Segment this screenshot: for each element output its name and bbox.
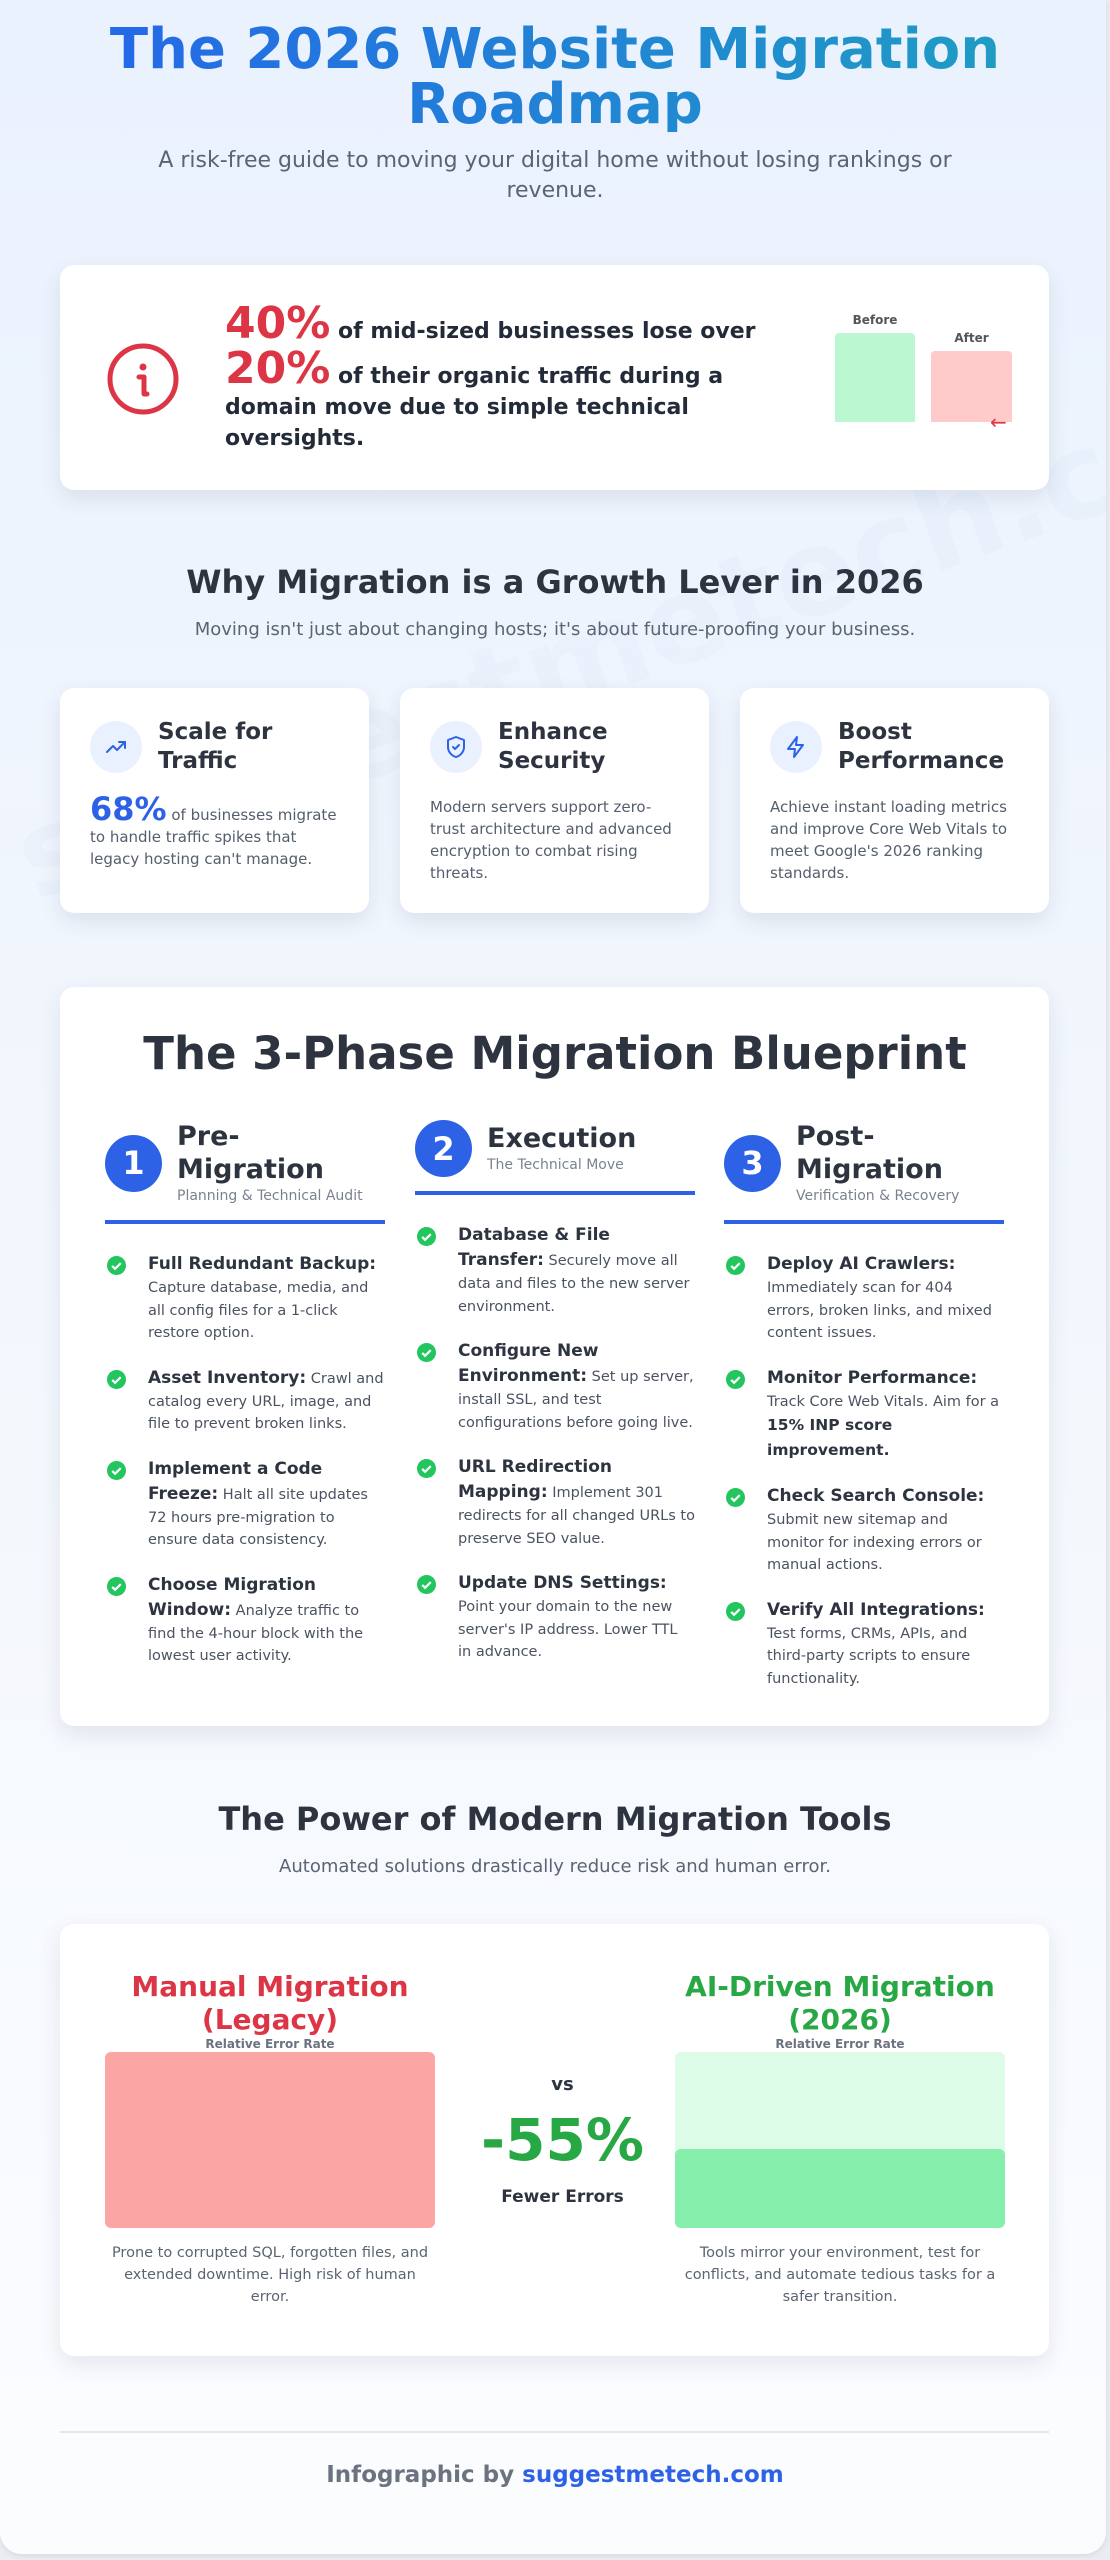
footer: Infographic by suggestmetech.com bbox=[326, 2462, 784, 2488]
column: post-migration: 3 bbox=[741, 1144, 764, 1182]
column: post-migration: Check Search Console: Submit new sitemap and monitor for indexing errors or manual actions. bbox=[767, 1486, 984, 1573]
panel: boost performance: Achieve instant loading metrics and improve Core Web Vitals to meet Google's 2026 ranking standards. bbox=[770, 798, 1007, 882]
manual migration: (Legacy) bbox=[202, 2003, 338, 2036]
title: Roadmap bbox=[407, 72, 703, 137]
chart: before/after: Before bbox=[853, 313, 897, 327]
subheading: tools: Automated solutions drastically reduce risk and human error. bbox=[279, 1856, 831, 1877]
title bbox=[0, 22, 1110, 132]
column: pre-migration: Pre- bbox=[177, 1121, 240, 1152]
ai migration: Relative Error Rate bbox=[775, 2037, 905, 2051]
column: post-migration bbox=[724, 1121, 1004, 1686]
panel: enhance security bbox=[400, 688, 709, 913]
ai migration: AI-Driven Migration bbox=[685, 1970, 995, 2003]
bar: manual bbox=[105, 2052, 435, 2228]
panel: alert stat bbox=[60, 265, 1049, 490]
chart: before/after: After bbox=[954, 331, 989, 345]
subtitle: A risk-free guide to moving your digital home without losing rankings or revenue. bbox=[158, 148, 952, 203]
panel: scale for traffic bbox=[60, 688, 369, 913]
panel: enhance security: Modern servers support zero-trust architecture and advanced encryption to combat rising threats. bbox=[430, 798, 672, 882]
column: execution bbox=[415, 1120, 695, 1660]
panel: scale for traffic: 68% of businesses migrate to handle traffic spikes that legacy hosting can't manage. bbox=[90, 790, 337, 868]
stat text: 40% of mid-sized businesses lose over 20% of their organic traffic during a domain move due to simple technical oversights. bbox=[225, 298, 756, 451]
arrow: ← bbox=[990, 410, 1007, 434]
vs center: vs bbox=[551, 2074, 574, 2095]
column: post-migration: Monitor Performance: Track Core Web Vitals. Aim for a 15% INP score improvement. bbox=[767, 1368, 999, 1459]
column: pre-migration: 1 bbox=[122, 1144, 145, 1182]
heading: tools: The Power of Modern Migration Tools bbox=[218, 1800, 892, 1838]
column: execution: 2 bbox=[432, 1130, 455, 1168]
manual migration: Manual Migration bbox=[131, 1970, 409, 2003]
column: execution: Execution bbox=[487, 1123, 636, 1154]
column: post-migration: Deploy AI Crawlers: Immediately scan for 404 errors, broken links, and mixed content issues. bbox=[767, 1254, 992, 1341]
panel: blueprint bbox=[60, 987, 1049, 1726]
column: pre-migration: Asset Inventory: Crawl and catalog every URL, image, and file to prevent broken links. bbox=[148, 1368, 384, 1432]
column: pre-migration: Implement a Code Freeze: Halt all site updates 72 hours pre-migration to ensure data consistency. bbox=[148, 1458, 368, 1548]
ai migration: (2026) bbox=[788, 2003, 892, 2036]
heading: why migration: Why Migration is a Growth Lever in 2026 bbox=[186, 563, 924, 601]
icon: info bbox=[108, 344, 178, 414]
vs center: -55% bbox=[481, 2106, 644, 2174]
column: execution: Database & File Transfer: Securely move all data and files to the new server environment. bbox=[458, 1225, 689, 1314]
vs center: Fewer Errors bbox=[501, 2187, 624, 2207]
column: post-migration: Post- bbox=[796, 1121, 875, 1152]
heading: blueprint: The 3-Phase Migration Blueprint bbox=[143, 1027, 967, 1080]
column: pre-migration bbox=[105, 1121, 385, 1664]
manual migration bbox=[105, 1970, 435, 2305]
panel: boost performance bbox=[740, 688, 1049, 913]
column: execution: Update DNS Settings: Point your domain to the new server's IP address. Lower TTL in advance. bbox=[458, 1573, 677, 1660]
column: pre-migration: Migration bbox=[177, 1154, 324, 1185]
title: The 2026 Website Migration bbox=[110, 17, 1000, 82]
column: execution: URL Redirection Mapping: Implement 301 redirects for all changed URLs to preserve SEO value. bbox=[458, 1457, 695, 1546]
panel: scale for traffic: Scale for Traffic bbox=[158, 719, 272, 774]
column: pre-migration: Full Redundant Backup: Capture database, media, and all config files for a 1-click restore option. bbox=[148, 1254, 376, 1341]
bar: ai bbox=[675, 2052, 1005, 2228]
column: pre-migration: Planning & Technical Audit bbox=[177, 1188, 363, 1204]
panel: enhance security: Enhance Security bbox=[498, 719, 608, 774]
subheading: Moving isn't just about changing hosts; it's about future-proofing your business. bbox=[195, 619, 915, 640]
column: post-migration: Verify All Integrations: Test forms, CRMs, APIs, and third-party scripts to ensure functionality. bbox=[767, 1600, 985, 1686]
column: post-migration: Verification & Recovery bbox=[796, 1188, 959, 1204]
vs center bbox=[481, 2074, 644, 2207]
column: post-migration: Migration bbox=[796, 1154, 943, 1185]
panel: comparison bbox=[60, 1924, 1049, 2356]
manual migration: Prone to corrupted SQL, forgotten files, and extended downtime. High risk of human error. bbox=[112, 2245, 428, 2305]
ai migration bbox=[675, 1970, 1005, 2305]
chart: before/after bbox=[835, 313, 1012, 434]
column: execution: Configure New Environment: Set up server, install SSL, and test configurations before going live. bbox=[458, 1341, 694, 1430]
column: pre-migration: Choose Migration Window: Analyze traffic to find the 4-hour block with the lowest user activity. bbox=[148, 1574, 363, 1664]
manual migration: Relative Error Rate bbox=[205, 2037, 335, 2051]
column: execution: The Technical Move bbox=[487, 1157, 624, 1173]
ai migration: Tools mirror your environment, test for conflicts, and automate tedious tasks for a safer transition. bbox=[685, 2245, 995, 2305]
panel: boost performance: Boost Performance bbox=[838, 719, 1004, 774]
